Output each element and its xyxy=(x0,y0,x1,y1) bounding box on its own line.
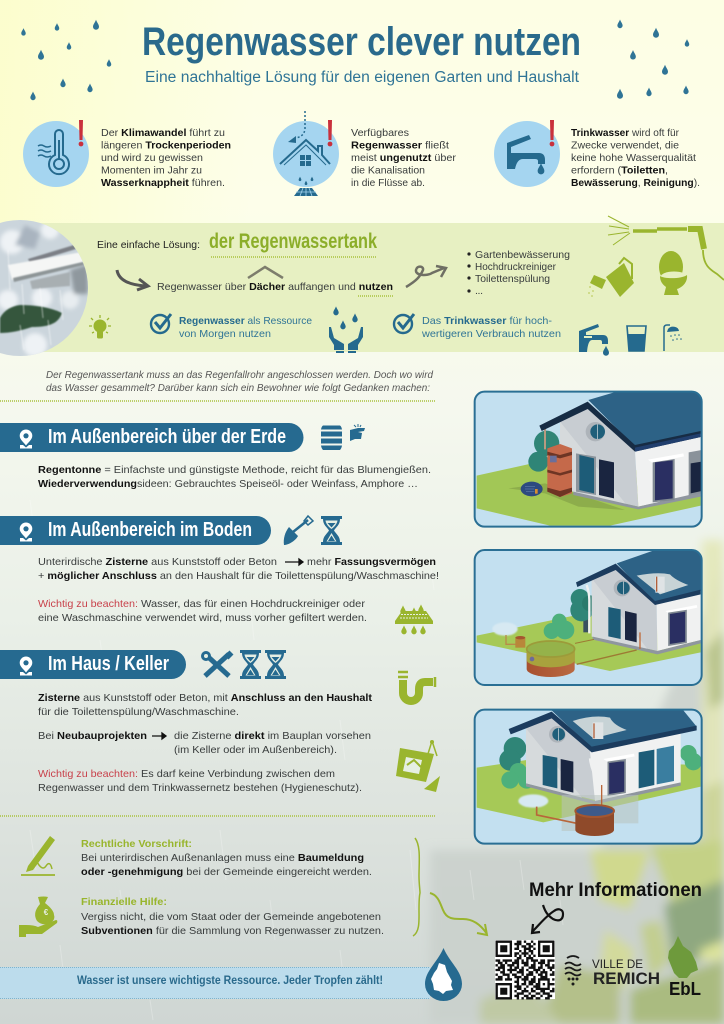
text: rain barrel xyxy=(38,464,431,490)
text: hygiene warning: Regenwasser und dem Trinkwassernetz bestehen (Hygieneschutz). xyxy=(38,782,362,794)
heading pill: Im Außenbereich im Boden xyxy=(48,519,252,541)
arrow: loop to QR xyxy=(532,905,563,933)
section: above ground xyxy=(0,423,431,490)
text: financial aid xyxy=(81,896,384,937)
check: resource: von Morgen nutzen xyxy=(179,328,271,340)
more information xyxy=(529,880,702,933)
text: unused rainwater: Regenwasser fließt xyxy=(351,140,449,152)
text: hygiene warning xyxy=(38,768,362,794)
icon: watering can xyxy=(588,258,634,297)
problem: climate xyxy=(23,120,231,189)
brace xyxy=(413,838,420,936)
list: uses: ... xyxy=(475,285,483,297)
text: unused rainwater: die Kanalisation xyxy=(351,164,425,176)
text: collect rainwater: Regenwasser über Dächer auffangen und nutzen xyxy=(157,281,393,293)
icon: faucet small xyxy=(579,324,609,356)
list: uses: Gartenbewässerung xyxy=(475,249,570,261)
illustration: underground cistern xyxy=(475,550,703,685)
icon: toilet xyxy=(659,251,688,295)
icon: hands with drops xyxy=(329,306,363,353)
text: hygiene warning: Wichtig zu beachten: xyxy=(38,768,138,780)
text: rain barrel: Wiederverwendungsideen: Gebrauchtes Speiseöl- oder Weinfass, Amphore … xyxy=(38,478,418,490)
text: new builds xyxy=(38,730,371,756)
title: Regenwasser clever nutzen xyxy=(142,20,581,64)
text: drinking water: Zwecke verwendet, die xyxy=(571,140,679,152)
icon: shower xyxy=(664,325,682,351)
illustration: cistern in cellar xyxy=(475,710,702,844)
text: unused rainwater: in die Flüsse ab. xyxy=(351,177,425,189)
text: rain barrel: Regentonne = Einfachste und günstigste Methode, reicht für das Blumengießen. xyxy=(38,464,431,476)
text: new builds: Bei Neubauprojekten xyxy=(38,730,147,742)
intro text: Der Regenwassertank muss an das Regenfallrohr angeschlossen werden. Doch wo wird xyxy=(46,369,434,381)
text: cistern in house: für die Toilettenspülung/Waschmaschine. xyxy=(38,706,239,718)
check: drinking water: wertigeren Verbrauch nutzen xyxy=(421,328,561,340)
logo: Ville de Remich xyxy=(565,956,660,988)
icon: faucet xyxy=(494,120,560,187)
problem: unused rainwater xyxy=(273,111,457,196)
icon: roof xyxy=(248,267,283,278)
logo: EbL xyxy=(668,936,701,999)
text: drinking water: Bewässerung, Reinigung). xyxy=(571,177,700,189)
illustration: house with rain barrel xyxy=(475,392,703,527)
icon: pressure washer xyxy=(608,216,724,280)
rain drops right xyxy=(617,19,689,99)
heading pill: Im Außenbereich über der Erde xyxy=(48,426,286,448)
text: unused rainwater xyxy=(351,127,457,189)
text: drinking water: erfordern (Toiletten, xyxy=(571,164,668,176)
panel: solution band xyxy=(0,216,724,360)
icon: pipe xyxy=(398,672,435,701)
problem: drinking water xyxy=(494,120,700,189)
text: cistern: Unterirdische Zisterne aus Kunststoff oder Beton xyxy=(38,556,277,568)
text: drinking water: keine hohe Wasserqualität xyxy=(571,152,696,164)
check: resource: Regenwasser als Ressource xyxy=(179,315,312,327)
financial aid xyxy=(19,896,384,937)
text: legal requirement xyxy=(81,838,372,878)
icon: house with rain xyxy=(273,111,339,196)
text: climate: Wasserknappheit führen. xyxy=(101,177,225,189)
text: cistern: mehr Fassungsvermögen xyxy=(307,556,436,568)
text: climate: Momenten im Jahr zu xyxy=(101,164,202,176)
icon: lightbulb xyxy=(89,315,111,338)
intro text xyxy=(46,369,434,394)
icon: money bag in hand: € xyxy=(44,908,49,917)
list: uses xyxy=(467,249,570,297)
icon: building plan xyxy=(396,740,440,792)
text: filter warning: eine Waschmaschine verwendet wird, muss vorher gefiltert werden. xyxy=(38,612,367,624)
text: financial aid: Finanzielle Hilfe: xyxy=(81,896,167,908)
text: drinking water: Trinkwasser wird oft für xyxy=(571,127,679,139)
text: unused rainwater: Verfügbares xyxy=(351,127,409,139)
heading pill xyxy=(0,516,271,545)
text: legal requirement: oder -genehmigung bei der Gemeinde eingereicht werden. xyxy=(81,866,372,878)
logo: Ville de Remich: VILLE DE xyxy=(592,957,643,971)
legal requirement xyxy=(21,836,372,878)
icon: two hourglasses xyxy=(240,650,286,679)
text: climate: längeren Trockenperioden xyxy=(101,140,231,152)
footer banner xyxy=(0,948,462,1001)
text: filter warning: Wasser, das für einen Hochdruckreiniger oder xyxy=(141,598,366,610)
text: legal requirement: Rechtliche Vorschrift: xyxy=(81,838,192,850)
text: climate: Der Klimawandel führt zu xyxy=(101,127,225,139)
heading pill xyxy=(0,650,186,679)
icon: glass xyxy=(627,326,646,351)
icon: thermometer xyxy=(23,120,89,187)
intro text: das Wasser gesammelt? Darüber kann sich ein Bewohner wie folgt Gedanken machen: xyxy=(46,382,430,394)
logo: EbL: EbL xyxy=(669,979,701,999)
text: drinking water xyxy=(571,127,700,189)
QR code xyxy=(495,940,555,999)
icon: pen xyxy=(21,836,55,875)
list: uses: Hochdruckreiniger xyxy=(475,261,556,273)
text: new builds: die Zisterne direkt im Bauplan vorsehen xyxy=(174,730,371,742)
icon: filter xyxy=(395,604,433,634)
text: filter warning xyxy=(38,598,367,624)
text: cistern xyxy=(38,556,439,582)
text: new builds: (im Keller oder im Außenbereich). xyxy=(174,744,337,756)
photo: rain on gutter xyxy=(0,218,90,360)
subtitle: Eine nachhaltige Lösung für den eigenen Garten und Haushalt xyxy=(145,69,580,86)
icon: money bag in hand xyxy=(19,896,57,937)
section: house / cellar xyxy=(0,650,440,794)
text: cistern in house: Zisterne aus Kunststoff oder Beton, mit Anschluss an den Haushalt xyxy=(38,692,373,704)
icon: water drop with Luxembourg xyxy=(425,948,462,1001)
text: financial aid: Subventionen für die Sammlung von Regenwasser zu nutzen. xyxy=(81,925,384,937)
text: filter warning: Wichtig zu beachten: xyxy=(38,598,138,610)
text: financial aid: Vergiss nicht, die vom Staat oder der Gemeinde angebotenen xyxy=(81,911,381,923)
heading pill: Im Haus / Keller xyxy=(48,653,169,675)
arrow: green to QR xyxy=(430,893,487,935)
list: uses: Toilettenspülung xyxy=(475,273,550,285)
heading pill xyxy=(0,423,304,452)
icon: pointing hand xyxy=(350,424,365,441)
check: drinking water: Das Trinkwasser für hoch- xyxy=(422,315,553,327)
check: resource xyxy=(151,314,312,340)
logo: Ville de Remich: REMICH xyxy=(593,969,660,988)
icon: hourglass xyxy=(321,516,342,545)
rain drops left xyxy=(21,20,111,100)
text: unused rainwater: meist ungenutzt über xyxy=(351,152,457,164)
text: hygiene warning: Es darf keine Verbindung zwischen dem xyxy=(141,768,335,780)
icon: shovel xyxy=(284,516,313,545)
footer banner: Wasser ist unsere wichtigste Ressource. Jeder Tropfen zählt! xyxy=(77,975,383,987)
icon: barrel xyxy=(321,426,342,450)
label: simple solution: Eine einfache Lösung: xyxy=(97,239,200,251)
icon: tools xyxy=(202,652,231,676)
text: cistern in house xyxy=(38,692,373,718)
label: simple solution xyxy=(97,230,377,257)
text: climate xyxy=(101,127,231,189)
more information: Mehr Informationen xyxy=(529,880,702,901)
text: legal requirement: Bei unterirdischen Außenanlagen muss eine Baumeldung xyxy=(81,852,364,864)
arrow: curved to roof xyxy=(117,270,148,290)
arrow: squiggle xyxy=(406,266,446,287)
text: cistern: + möglicher Anschluss an den Haushalt für die Toilettenspülung/Waschmaschine! xyxy=(38,570,439,582)
section: in ground xyxy=(0,516,439,634)
label: simple solution: der Regenwassertank xyxy=(209,230,377,253)
text: climate: und wird zu gewissen xyxy=(101,152,203,164)
check: drinking water xyxy=(394,314,561,340)
